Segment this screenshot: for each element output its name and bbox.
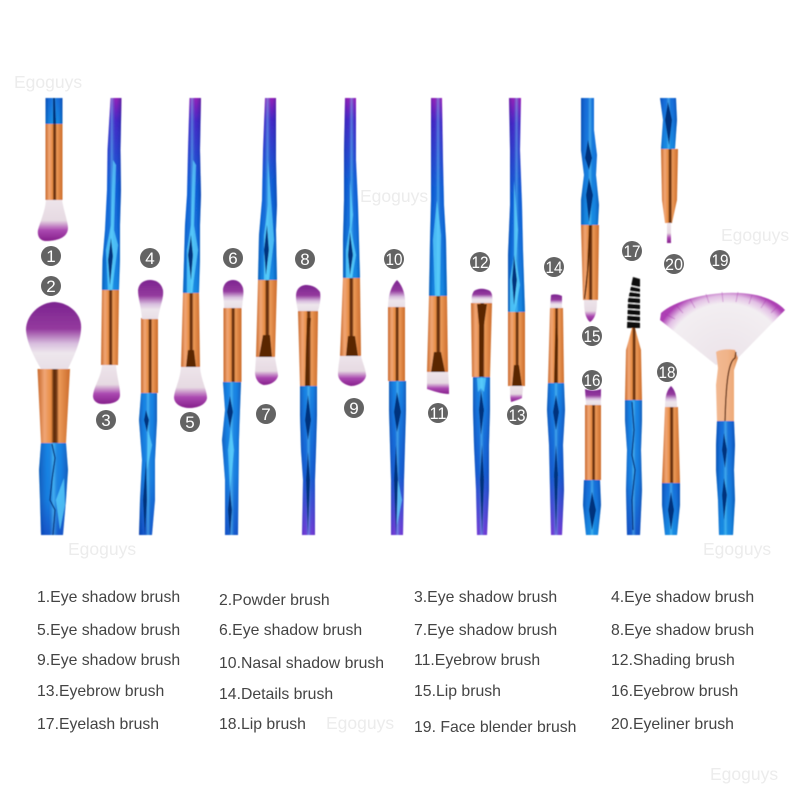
legend column 4: 20.Eyeliner brush — [611, 716, 734, 733]
legend column 1: 1.Eye shadow brush — [37, 589, 180, 606]
number badge 1: 1 — [46, 247, 56, 266]
number badge 6: 6 — [228, 249, 238, 268]
number badge 3 — [96, 410, 116, 430]
number badge 8 — [295, 249, 315, 269]
number badge 10: 10 — [386, 250, 402, 269]
number badge 8: 8 — [300, 250, 310, 269]
watermarks: Egoguys — [68, 539, 136, 559]
legend column 3 — [414, 589, 576, 736]
number badge 17: 17 — [624, 242, 640, 261]
brush 6 — [222, 280, 243, 535]
legend column 4: 4.Eye shadow brush — [611, 589, 754, 606]
legend column 2: 6.Eye shadow brush — [219, 622, 362, 639]
legend column 3: 15.Lip brush — [414, 683, 501, 700]
brush 4 — [138, 280, 163, 535]
watermarks: Egoguys — [360, 186, 428, 206]
number badge 4 — [140, 248, 160, 268]
brush 11 — [427, 98, 449, 394]
legend column 4: 8.Eye shadow brush — [611, 622, 754, 639]
brush 2 — [26, 302, 81, 535]
legend column 1: 5.Eye shadow brush — [37, 622, 180, 639]
legend column 4: 12.Shading brush — [611, 652, 735, 669]
number badge 9 — [344, 398, 364, 418]
number badge 1 — [41, 246, 61, 266]
brush 20 — [660, 98, 678, 243]
number badge 3: 3 — [101, 411, 111, 430]
legend column 3: 7.Eye shadow brush — [414, 622, 557, 639]
number badge 2: 2 — [46, 277, 56, 296]
brush 7 — [255, 98, 278, 385]
brush 16 — [583, 389, 601, 535]
number badge 12: 12 — [472, 253, 488, 272]
number badge 13: 13 — [508, 406, 526, 425]
number badge 4: 4 — [145, 249, 155, 268]
brush 13 — [508, 98, 525, 402]
watermarks: Egoguys — [710, 764, 778, 784]
brush 17 — [625, 277, 642, 535]
number badge 5: 5 — [185, 413, 195, 432]
brush 18 — [662, 386, 680, 535]
number badge 14: 14 — [546, 258, 562, 277]
brush 10 — [388, 280, 406, 535]
legend column 2: 18.Lip brush — [219, 716, 306, 733]
number badge 6 — [223, 248, 243, 268]
brush 3 — [93, 98, 122, 404]
brush 8 — [296, 285, 320, 535]
number badge 2 — [41, 276, 61, 296]
number badge 19: 19 — [712, 251, 728, 270]
brush 14 — [547, 294, 565, 535]
brush 5 — [174, 98, 207, 408]
watermarks: Egoguys — [14, 72, 82, 92]
number badge 7 — [256, 404, 276, 424]
number badge 15: 15 — [584, 327, 600, 346]
legend column 2: 2.Powder brush — [219, 592, 330, 609]
legend column 2: 10.Nasal shadow brush — [219, 655, 384, 672]
legend column 3: 19. Face blender brush — [414, 719, 576, 736]
legend column 3: 11.Eyebrow brush — [414, 652, 540, 669]
brush 1 — [38, 98, 68, 241]
legend column 1: 9.Eye shadow brush — [37, 652, 180, 669]
legend column 4 — [611, 589, 754, 733]
legend column 3: 3.Eye shadow brush — [414, 589, 557, 606]
brush 19 — [660, 292, 785, 535]
legend column 4: 16.Eyebrow brush — [611, 683, 738, 700]
legend column 1: 13.Eyebrow brush — [37, 683, 164, 700]
legend column 2: 14.Details brush — [219, 686, 333, 703]
legend column 1 — [37, 589, 180, 733]
number badge 18: 18 — [658, 363, 676, 382]
legend column 1: 17.Eyelash brush — [37, 716, 159, 733]
number badge 11: 11 — [430, 404, 446, 423]
number badge 16: 16 — [584, 371, 600, 390]
number badge 5 — [180, 412, 200, 432]
watermarks: Egoguys — [703, 539, 771, 559]
brush 12 — [471, 289, 492, 535]
watermarks: Egoguys — [326, 713, 394, 733]
number badge 7: 7 — [261, 405, 271, 424]
brush 15 — [581, 98, 599, 322]
brush 9 — [338, 98, 366, 386]
legend column 2 — [219, 592, 384, 733]
number badge 9: 9 — [349, 399, 359, 418]
number badge 20: 20 — [665, 255, 683, 274]
watermarks: Egoguys — [721, 225, 789, 245]
